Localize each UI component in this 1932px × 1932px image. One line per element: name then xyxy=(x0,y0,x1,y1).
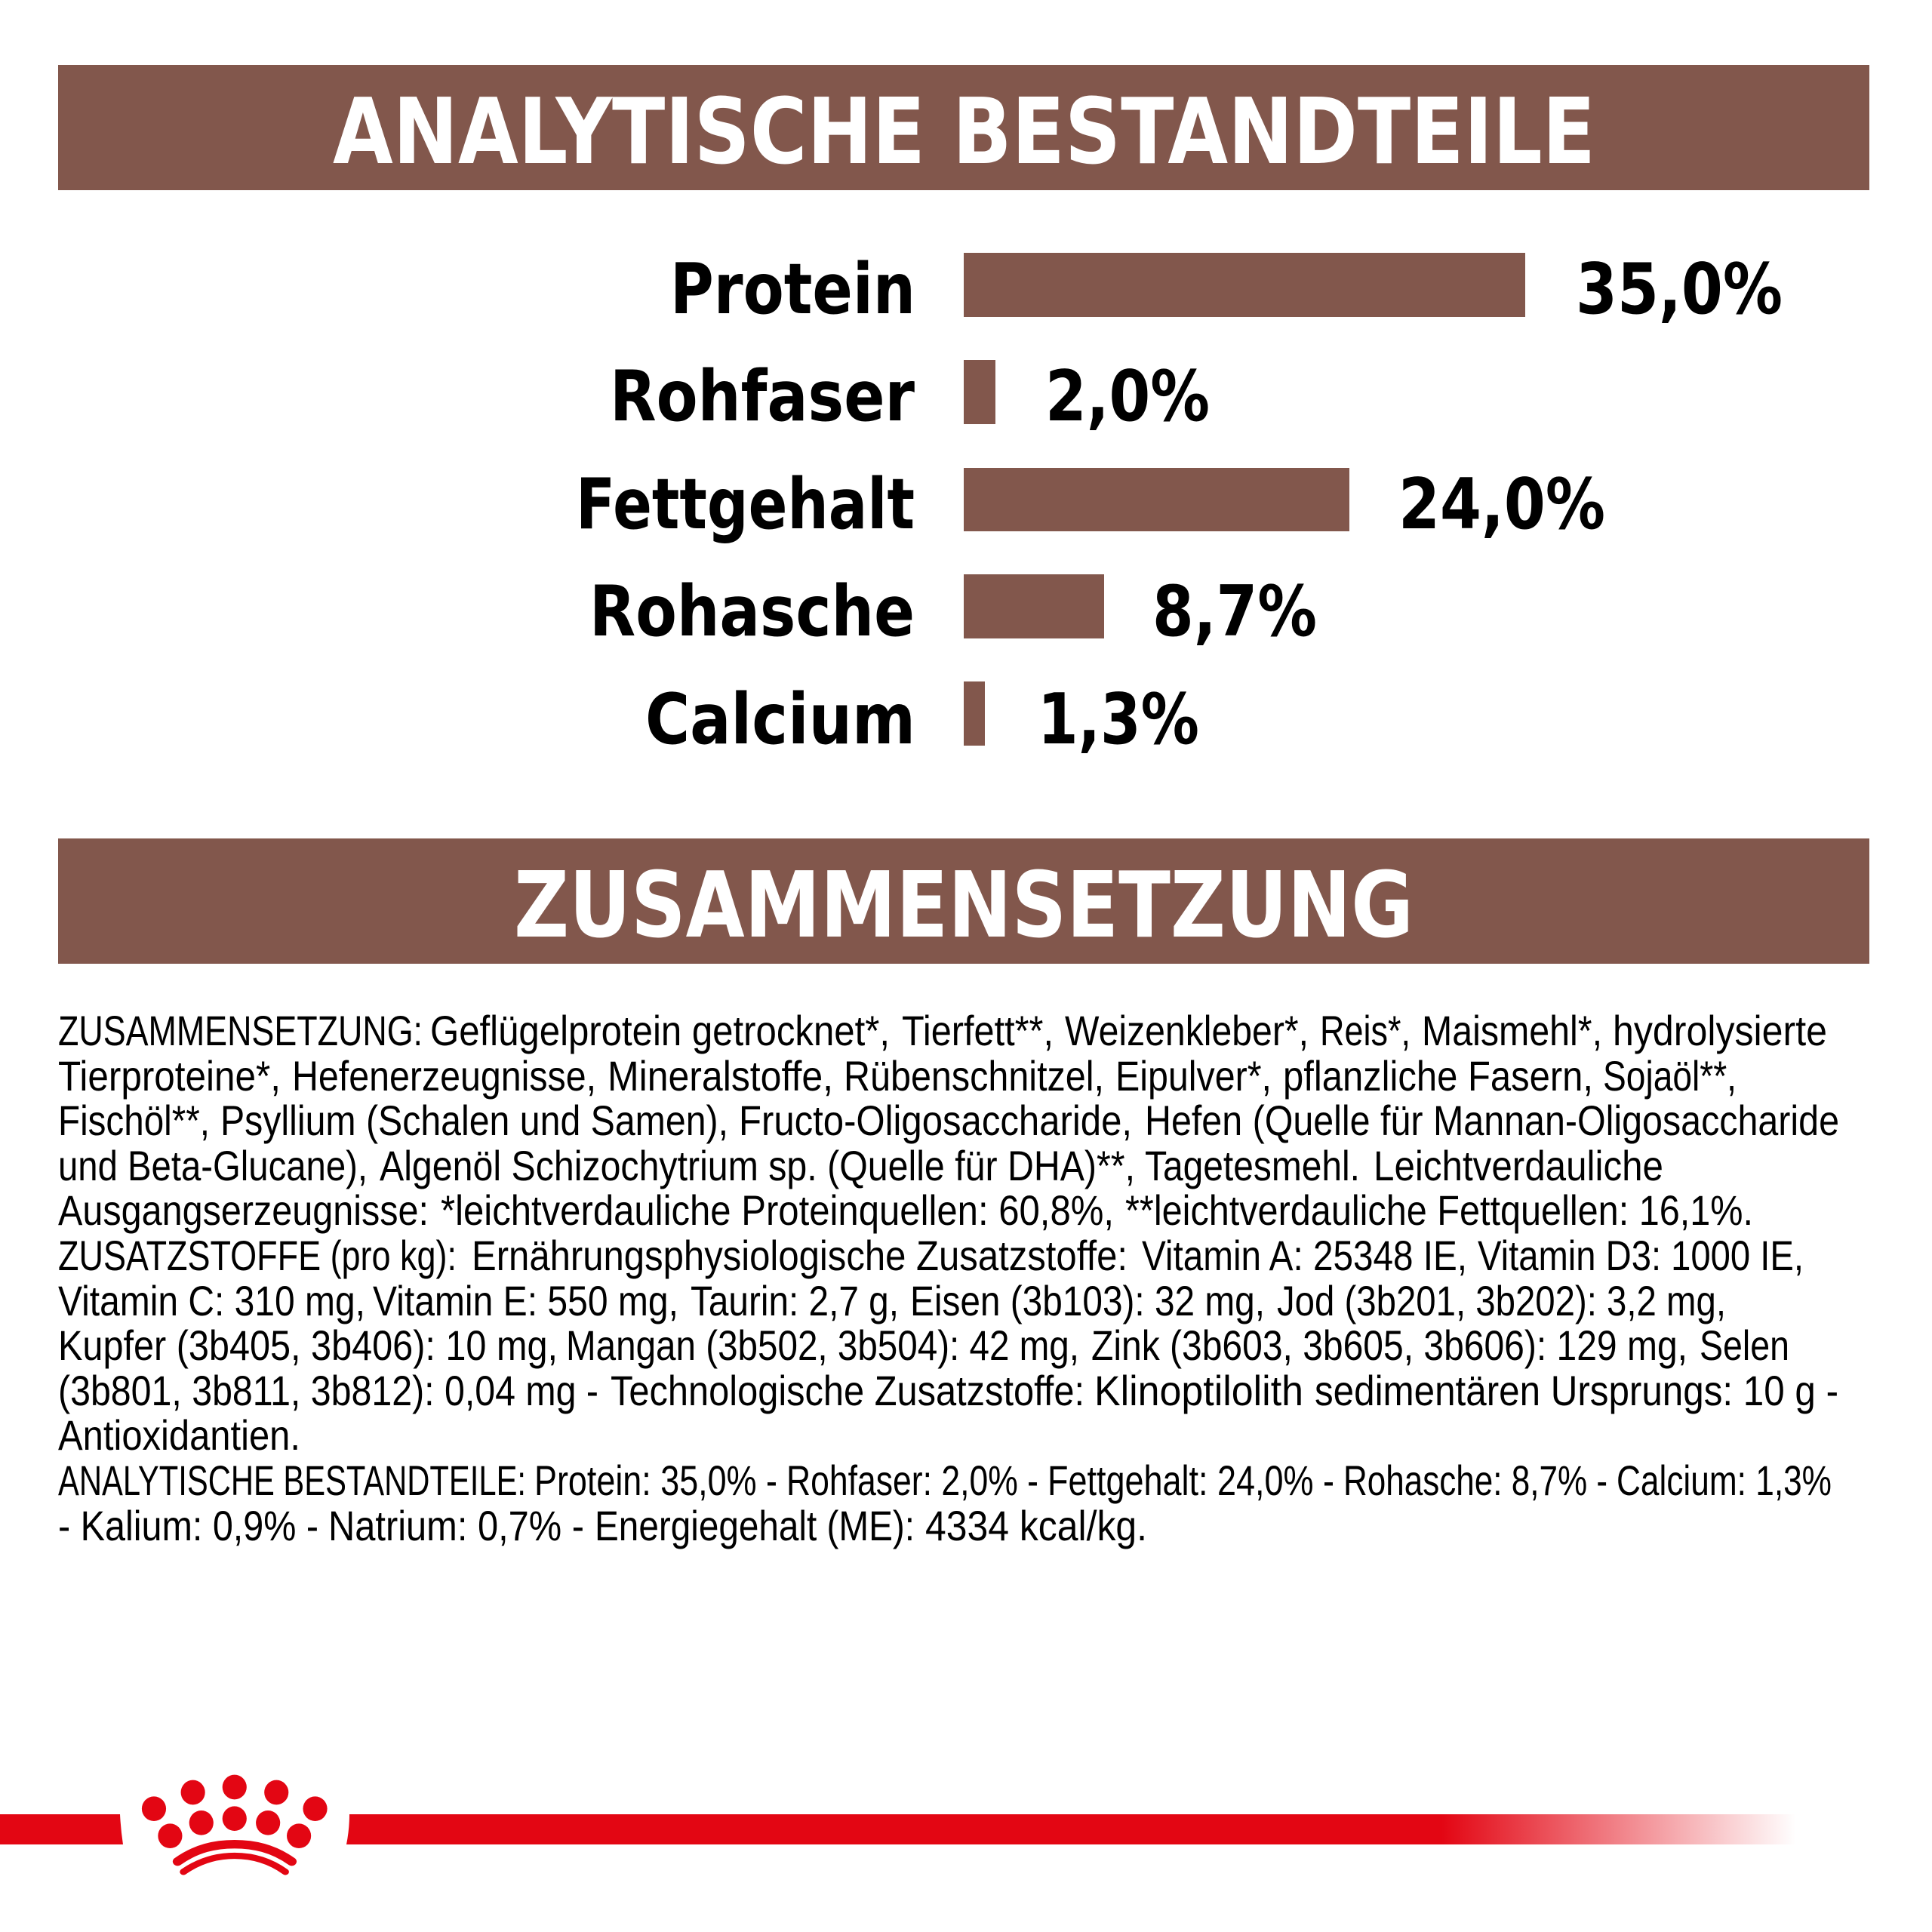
text block: composition: Vitamin A: 25348 IE, xyxy=(1142,1232,1467,1279)
text block: composition: Eipulver*, xyxy=(1115,1052,1272,1100)
text block: composition: Fischöl**, xyxy=(58,1097,210,1144)
text block: composition: ANALYTISCHE BESTANDTEILE: xyxy=(58,1457,526,1504)
row: fettgehalt: Fettgehalt xyxy=(576,463,915,545)
text block: composition: Fettgehalt: 24,0% - xyxy=(1048,1457,1334,1504)
text block: composition: hydrolysierte xyxy=(1613,1007,1827,1054)
row: rohasche xyxy=(589,571,1317,652)
text block: composition: Geflügelprotein getrocknet*, xyxy=(430,1007,890,1054)
text block: composition: Leichtverdauliche xyxy=(1374,1142,1663,1189)
row: rohfaser: 2,0% xyxy=(1045,355,1210,437)
text block: composition: Rohasche: 8,7% - xyxy=(1343,1457,1607,1504)
text block: composition: Vitamin E: 550 mg, xyxy=(373,1277,678,1324)
text block: composition: - Kalium: 0,9% - xyxy=(58,1502,318,1549)
text block: composition: Jod (3b201, 3b202): 3,2 mg, xyxy=(1277,1277,1726,1324)
text block: composition: Sojaöl**, xyxy=(1603,1052,1737,1100)
text block: composition xyxy=(58,1007,1839,1549)
row: fettgehalt xyxy=(576,463,1605,545)
text block: composition: Vitamin C: 310 mg, xyxy=(58,1277,365,1324)
row: calcium: Calcium xyxy=(645,678,915,760)
text block: composition: ZUSAMMENSETZUNG: xyxy=(58,1007,423,1054)
text block: composition: Selen xyxy=(1700,1321,1789,1369)
row: rohfaser xyxy=(610,355,1210,437)
text block: composition: Technologische Zusatzstoffe: xyxy=(611,1367,1084,1414)
text block: composition: *leichtverdauliche Proteinquellen: 60,8%, xyxy=(441,1186,1114,1234)
text block: composition: Tagetesmehl. xyxy=(1145,1142,1360,1189)
text block: composition: Zink (3b603, 3b605, 3b606): 129 mg, xyxy=(1091,1321,1687,1369)
text block: composition: Natrium: 0,7% - xyxy=(328,1502,584,1549)
text block: composition: ZUSATZSTOFFE (pro kg): xyxy=(58,1232,457,1279)
row: calcium xyxy=(645,678,1199,760)
text block: composition: Energiegehalt (ME): xyxy=(595,1502,915,1549)
footer band: red line with fade xyxy=(0,1814,1796,1844)
row: fettgehalt: 24,0% xyxy=(1398,463,1605,545)
text block: composition: Calcium: 1,3% xyxy=(1617,1457,1832,1504)
row: protein xyxy=(670,248,1783,330)
text block: composition: Protein: 35,0% - xyxy=(534,1457,777,1504)
text block: composition: (3b801, 3b811, 3b812): 0,04 mg - xyxy=(58,1367,598,1414)
panel: analytische bestandteile header xyxy=(58,65,1869,190)
text block: composition: Eisen (3b103): 32 mg, xyxy=(910,1277,1265,1324)
heading: analytische bestandteile: ANALYTISCHE BESTANDTEILE xyxy=(333,80,1595,185)
text block: composition: Kupfer (3b405, 3b406): 10 mg, xyxy=(58,1321,558,1369)
text block: composition: Taurin: 2,7 g, xyxy=(691,1277,899,1324)
text block: composition: Weizenkleber*, xyxy=(1065,1007,1309,1054)
text block: composition: sedimentären Ursprungs: 10 g - xyxy=(1315,1367,1838,1414)
bar chart: analytical constituents xyxy=(576,248,1783,760)
row: rohasche: 8,7% xyxy=(1152,571,1317,652)
text block: composition: Klinoptilolith xyxy=(1094,1367,1303,1414)
panel: zusammensetzung header xyxy=(58,838,1869,964)
text block: composition: Vitamin D3: 1000 IE, xyxy=(1478,1232,1804,1279)
text block: composition: Hefen (Quelle für Mannan-Oligosaccharide xyxy=(1145,1097,1839,1144)
text block: composition: pflanzliche Fasern, xyxy=(1283,1052,1593,1100)
text block: composition: Rohfaser: 2,0% - xyxy=(786,1457,1038,1504)
text block: composition: Hefenerzeugnisse, xyxy=(292,1052,596,1100)
text block: composition: und Beta-Glucane), xyxy=(58,1142,368,1189)
text block: composition: Mangan (3b502, 3b504): 42 mg, xyxy=(566,1321,1079,1369)
row: protein: Protein xyxy=(670,248,915,330)
heading: zusammensetzung: ZUSAMMENSETZUNG xyxy=(514,854,1414,958)
text block: composition: Tierfett**, xyxy=(902,1007,1054,1054)
icon: royal canin crown logo xyxy=(142,1775,328,1872)
text block: composition: Psyllium (Schalen und Samen), xyxy=(220,1097,728,1144)
row: rohasche: Rohasche xyxy=(589,571,915,652)
text block: composition: Algenöl Schizochytrium sp. (Quelle für DHA)**, xyxy=(380,1142,1135,1189)
text block: composition: Maismehl*, xyxy=(1422,1007,1602,1054)
text block: composition: Fructo-Oligosaccharide, xyxy=(739,1097,1132,1144)
text block: composition: Ernährungsphysiologische Zusatzstoffe: xyxy=(472,1232,1128,1279)
row: protein: 35,0% xyxy=(1576,248,1783,330)
text block: composition: Tierproteine*, xyxy=(58,1052,281,1100)
text block: composition: Mineralstoffe, xyxy=(608,1052,833,1100)
row: rohfaser: Rohfaser xyxy=(610,355,915,437)
text block: composition: 4334 kcal/kg. xyxy=(925,1502,1147,1549)
text block: composition: Antioxidantien. xyxy=(58,1411,300,1459)
text block: composition: Reis*, xyxy=(1320,1007,1411,1054)
row: calcium: 1,3% xyxy=(1038,678,1199,760)
text block: composition: Rübenschnitzel, xyxy=(844,1052,1104,1100)
text block: composition: Ausgangserzeugnisse: xyxy=(58,1186,429,1234)
text block: composition: **leichtverdauliche Fettquellen: 16,1%. xyxy=(1125,1186,1753,1234)
